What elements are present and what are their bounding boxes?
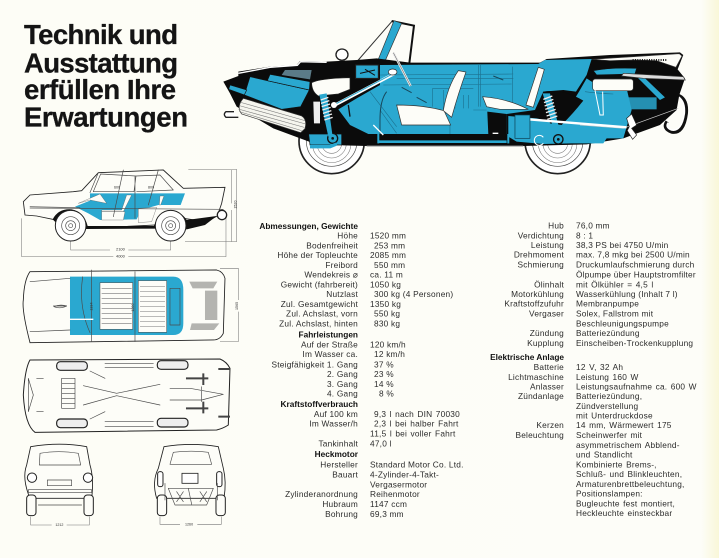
front view [25,444,93,527]
section: Motor continued: Batteriezündung [576,328,640,338]
rear suspension [515,93,627,145]
section: Fahrleistungen: 37 % [374,360,394,370]
spec table: left column [259,221,464,519]
section: Elektrische Anlage: Zündanlage [518,391,564,401]
track label: 1212 [55,523,63,527]
section: Elektrische Anlage: Lichtmaschine [508,372,564,382]
section: Abmessungen, Gewichte: Nutzlast [326,289,358,299]
section: Fahrleistungen: 120 km/h [370,340,406,350]
spec table: right column [490,221,697,518]
section: Motor continued: Verdichtung [518,230,564,240]
rear wheel [525,108,590,174]
wheels [55,210,186,241]
section: Motor continued: Kupplung [527,338,564,348]
section: Motor continued: Schmierung [518,260,564,270]
blue area [70,277,183,335]
section: Motor continued: Wasserkühlung (Inhalt 7 l) [576,289,678,299]
rear seat [483,67,544,109]
section: Fahrleistungen: 12 km/h [374,349,405,359]
section: Motor continued: Ölinhalt [534,279,564,289]
section: Abmessungen, Gewichte: 1050 kg [370,279,401,289]
section: Heckmotor: 1147 ccm [370,499,407,509]
seats white [100,281,167,332]
wheelbase label: 1520 [234,201,238,209]
rear bumper loop [666,95,686,132]
section: Abmessungen, Gewichte: Zul. Achslast, vorn [286,309,358,319]
tyres [27,495,93,516]
section: Heckmotor: Bauart [332,470,358,480]
black lower hull [53,209,217,229]
heat exchanger fins [238,98,306,133]
floor tube [367,125,523,146]
section: Elektrische Anlage: Beleuchtung [515,430,564,440]
section: Elektrische Anlage: Bugleuchte fest montiert, [576,498,675,508]
section: Fahrleistungen: Im Wasser ca. [302,349,358,359]
tyres [157,495,225,516]
outline [23,270,225,343]
section: Elektrische Anlage: Scheinwerfer mit [576,430,643,440]
section: Kraftstoffverbrauch: 2,3 l bei halber Fahrt [374,419,459,429]
wing mirror [336,49,348,75]
section: Heckmotor: Zylinderanordnung [285,489,358,499]
width labels: 1200 [131,304,135,312]
section: Fahrleistungen: Auf der Straße [301,340,358,350]
propeller [627,114,637,139]
hull silhouette [223,52,685,146]
section: Elektrische Anlage: Elektrische Anlage [490,352,564,362]
outline [23,359,230,432]
white stripe and details [30,270,180,342]
tail lights [158,472,222,487]
section: Elektrische Anlage: Armaturenbrettbeleuchtung, [576,479,685,489]
section: Kraftstoffverbrauch: Tankinhalt [318,438,358,448]
section: Abmessungen, Gewichte: 830 kg [374,318,400,328]
section: Motor continued: Ölpumpe über Hauptstromfilter [576,270,696,280]
windows and trim [30,170,223,218]
section: Elektrische Anlage: Leistung 160 W [576,372,639,382]
section: Abmessungen, Gewichte: Höhe der Topleuchte [277,250,358,260]
bumper and plate [28,480,92,505]
section: Motor continued: Hub [548,221,564,231]
section: Motor continued: max. 7,8 mkg bei 2500 U/min [576,250,690,260]
rear fin top [592,54,682,67]
section: Motor continued: Drehmoment [514,250,564,260]
section: Elektrische Anlage: und Standlicht [576,450,633,460]
rear view [155,444,225,526]
front mooring bar [224,112,238,117]
wheelbase label: 4000 [116,254,126,259]
wheelbase label: 600 [114,186,120,190]
section: Fahrleistungen: 23 % [374,369,394,379]
section: Elektrische Anlage: Heckleuchte einsteckbar [576,508,672,518]
section: Motor continued: 76,0 mm [576,221,610,231]
section: Heckmotor: Standard Motor Co. Ltd. [370,460,464,470]
section: Fahrleistungen [272,330,406,399]
section: Fahrleistungen: 8 % [379,389,394,399]
title: Erwartungen [24,102,188,133]
section: Abmessungen, Gewichte: 1350 kg [370,299,401,309]
wheelbase label [114,186,238,259]
wheelbase label: 800 [148,186,154,190]
track label: 1260 [185,522,193,526]
section: Abmessungen, Gewichte [259,221,453,328]
engine grilles [189,282,219,330]
chassis lines [28,363,223,427]
front storage grid [282,70,312,79]
section: Motor continued: 8 : 1 [576,230,593,240]
title: Ausstattung [24,47,178,78]
front wheel [299,108,364,174]
section: Heckmotor [285,449,464,519]
section: Fahrleistungen: 14 % [374,379,394,389]
section: Motor continued [504,221,696,348]
section: Abmessungen, Gewichte: ca. 11 m [370,270,403,280]
section: Elektrische Anlage [490,352,697,518]
section: Motor continued: Leistung [531,240,564,250]
section: Kraftstoffverbrauch: Auf 100 km [314,409,358,419]
width labels: 1334 [90,303,94,311]
section: Fahrleistungen: Fahrleistungen [299,330,358,340]
section: Elektrische Anlage: Positionslampen: [576,488,643,498]
section: Heckmotor: 69,3 mm [370,509,404,519]
section: Heckmotor: Reihenmotor [370,489,420,499]
cutaway illustration: convertible side view [223,21,686,174]
section: Kraftstoffverbrauch: 47,0 l [370,438,392,448]
section: Motor continued: Solex, Fallstrom mit [576,308,654,318]
section: Kraftstoffverbrauch: Kraftstoffverbrauch [281,399,358,409]
front tank [229,74,310,109]
section: Abmessungen, Gewichte: Bodenfreiheit [306,240,358,250]
width labels [90,302,239,312]
section: Elektrische Anlage: Kerzen [536,420,564,430]
rear engine bay [508,60,685,144]
dimension lines [22,169,237,257]
section: Elektrische Anlage: asymmetrischem Abblend- [576,440,680,450]
section: Kraftstoffverbrauch [281,399,460,448]
section: Elektrische Anlage: Anlasser [530,382,564,392]
white seats [78,194,164,223]
section: Kraftstoffverbrauch: 11,5 l bei voller Fahrt [370,429,456,439]
section: Heckmotor: Hubraum [322,499,358,509]
section: Abmessungen, Gewichte: Zul. Gesamtgewicht [281,299,358,309]
section: Elektrische Anlage: Batteriezündung, [576,391,642,401]
section: Abmessungen, Gewichte: Wendekreis ⌀ [304,270,358,280]
number plate [182,473,198,483]
car body [23,170,225,228]
screws and hull [165,483,217,505]
section: Motor continued: mit Ölkühler = 4,5 l [576,279,653,289]
width labels: 1565 [235,302,239,310]
rear loop [217,210,227,220]
section: Abmessungen, Gewichte: 550 mm [374,260,405,270]
section: Abmessungen, Gewichte: 300 kg (4 Personen) [374,289,453,299]
blue cutaway [75,193,185,220]
title: Technik und [24,19,178,50]
front suspension [309,93,342,147]
section: Abmessungen, Gewichte: Freibord [325,260,358,270]
blueprint underside view [23,359,230,432]
section: Motor continued: Vergaser [529,308,564,318]
windshield frame [358,21,414,65]
section: Abmessungen, Gewichte: 253 mm [374,240,405,250]
section: Fahrleistungen: 3. Gang [327,379,358,389]
front deck highlight [238,62,327,73]
blueprint side elevation [22,169,238,259]
white reservoir [312,78,350,96]
section: Motor continued: Einscheiben-Trockenkupplung [576,338,693,348]
section: Abmessungen, Gewichte: 2085 mm [370,250,406,260]
rudder struts [186,369,230,417]
section: Heckmotor: 4-Zylinder-4-Takt- [370,470,439,480]
section: Abmessungen, Gewichte: Zul. Achslast, hinten [279,318,358,328]
section: Heckmotor: Bohrung [325,509,358,519]
title [24,19,188,133]
section: Elektrische Anlage: Zündverstellung [576,401,638,411]
section: Motor continued: Beschleunigungspumpe [576,318,669,328]
section: Abmessungen, Gewichte: 1520 mm [370,231,406,241]
blueprint top view [23,268,239,343]
section: Elektrische Anlage: Kombinierte Brems-, [576,460,657,470]
front seat [397,71,466,125]
steering column [331,53,411,108]
section: Elektrische Anlage: Leistungsaufnahme ca. 600 W [576,382,697,392]
section: Fahrleistungen: Steigfähigkeit 1. Gang [272,360,358,370]
title: erfüllen Ihre [24,74,176,105]
section: Abmessungen, Gewichte: Höhe [337,231,358,241]
section: Fahrleistungen: 4. Gang [327,389,358,399]
section: Heckmotor: Heckmotor [315,449,359,459]
section: Elektrische Anlage: mit Unterdruckdose [576,411,653,421]
section: Fahrleistungen: 2. Gang [327,369,358,379]
section: Motor continued: Zündung [530,328,564,338]
section: Elektrische Anlage: Schluß- und Blinkleuchten, [576,469,682,479]
section: Kraftstoffverbrauch: Im Wasser/h [309,419,358,429]
section: Elektrische Anlage: Batterie [534,362,564,372]
section: Abmessungen, Gewichte: Abmessungen, Gewichte [259,221,358,231]
section: Heckmotor: Hersteller [320,460,358,470]
section: Elektrische Anlage: 12 V, 32 Ah [576,362,623,372]
wheels [57,361,188,428]
section: Abmessungen, Gewichte: Gewicht (fahrbereit) [281,279,358,289]
section: Abmessungen, Gewichte: 550 kg [374,309,400,319]
section: Motor continued: Druckumlaufschmierung durch [576,260,695,270]
section: Motor continued: 38,3 PS bei 4750 U/min [576,240,669,250]
section: Heckmotor: Vergasermotor [370,480,427,490]
section: Kraftstoffverbrauch: 9,3 l nach DIN 70030 [374,409,460,419]
section: Motor continued: Motorkühlung [511,289,564,299]
cabin blue area [338,59,592,134]
wheelbase label: 2100 [116,246,126,251]
section: Motor continued: Kraftstoffzufuhr [504,299,564,309]
width dimension [220,268,238,342]
bow lamp [54,305,67,308]
section: Elektrische Anlage: 14 mm, Wärmewert 175 [576,420,672,430]
headlights [27,473,93,482]
section: Motor continued: Membranpumpe [576,299,639,309]
